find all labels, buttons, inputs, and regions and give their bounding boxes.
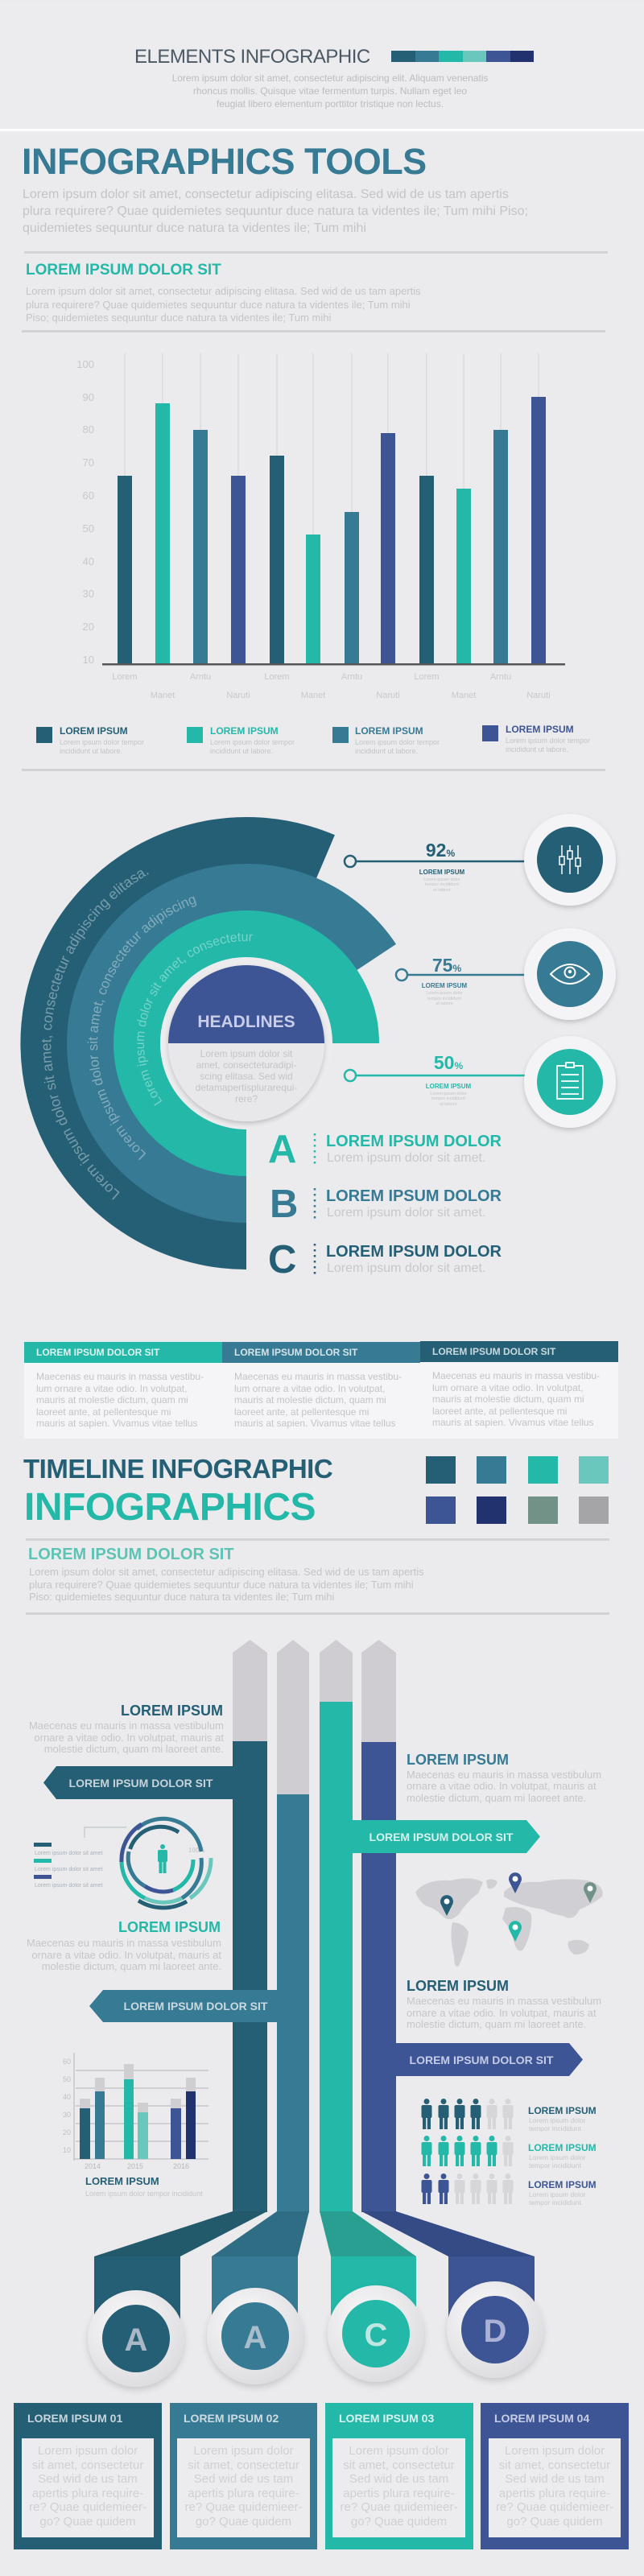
stat 50%	[345, 1052, 525, 1107]
people icons: Lorem ipsum dolor	[529, 2190, 586, 2198]
circle A second: A	[244, 2320, 266, 2355]
bar chart: Lorem	[414, 672, 440, 682]
bottom box 03: sit amet, consectetur	[343, 2458, 455, 2472]
stat 50%: LOREM IPSUM	[426, 1083, 472, 1090]
banner left 1	[43, 1766, 233, 1799]
intro paragraph: plura requirere? Quae quidemietes sequuntur duce natura ta videntes ile; Tum mihi Piso;	[23, 204, 528, 218]
chart legend: Lorem ipsum dolor tempor	[210, 738, 295, 746]
stat 75%: ut labore	[436, 1001, 453, 1006]
banner right 1	[353, 1820, 540, 1853]
bar chart: 50	[83, 522, 94, 535]
header subtext	[172, 72, 488, 109]
people icons: tempor incididunt	[529, 2198, 581, 2207]
column 1: mauris at sapien. Vivamus vitae tellus	[36, 1418, 198, 1429]
bottom box 04: go? Quae quidem	[506, 2515, 603, 2529]
bottom box 03: re? Quae quidemieer-	[341, 2500, 457, 2514]
list item C	[268, 1238, 502, 1282]
people icons: LOREM IPSUM	[528, 2105, 597, 2116]
bottom box 03: go? Quae quidem	[351, 2515, 447, 2529]
bottom box 02: re? Quae quidemieer-	[185, 2500, 302, 2514]
bar chart: Arntu	[190, 672, 211, 682]
chart intro text	[26, 285, 421, 324]
world map	[415, 1878, 603, 1967]
small bar chart: 2016	[173, 2162, 189, 2170]
circle A: A	[125, 2322, 147, 2358]
chart legend	[36, 724, 590, 755]
chart legend: incididunt ut labore.	[60, 747, 122, 755]
column 2: mauris at molestie dictum, quam mi	[234, 1394, 386, 1406]
chart legend: Lorem ipsum dolor tempor	[506, 737, 590, 745]
text block top right: molestie dictum, quam mi laoreet ante.	[407, 1792, 586, 1804]
bar chart: Arntu	[490, 672, 511, 682]
headlines text: HEADLINES	[197, 1013, 295, 1031]
timeline intro text: Piso: quidemietes sequuntur duce natura ta videntes ile; Tum mihi	[29, 1591, 334, 1603]
text block top left: Maecenas eu mauris in massa vestibulum	[29, 1719, 224, 1732]
list item A	[268, 1128, 502, 1171]
middle ring	[67, 864, 396, 1223]
headlines text: detamapertisplurarequi-	[196, 1082, 297, 1093]
column 1	[94, 1640, 267, 2337]
stat 75%: Lorem ipsum dolor	[426, 991, 463, 996]
list item C: C	[268, 1238, 296, 1282]
stat 92%: Lorem ipsum dolor	[423, 877, 460, 882]
heading: infographics tools: INFOGRAPHICS TOOLS	[22, 141, 427, 182]
small bar chart: 2015	[127, 2162, 143, 2170]
column 3: mauris at sapien. Vivamus vitae tellus	[432, 1417, 594, 1428]
circle C: C	[365, 2318, 387, 2353]
people icons: Lorem ipsum dolor	[529, 2116, 586, 2124]
bar chart: 90	[83, 391, 94, 403]
stat 92%: ut labore	[433, 888, 451, 893]
stat 50%: tempor incididunt	[431, 1096, 465, 1101]
banner left 2	[89, 1990, 277, 2022]
banner left 1: LOREM IPSUM DOLOR SIT	[69, 1777, 213, 1790]
bar chart: Lorem	[112, 672, 138, 682]
chart legend: LOREM IPSUM	[210, 725, 279, 737]
bar chart: 100	[76, 358, 94, 370]
column 1: Maecenas eu mauris in massa vestibu-	[36, 1371, 204, 1382]
text block top right: Maecenas eu mauris in massa vestibulum	[407, 1769, 601, 1781]
icon: clipboard	[524, 1036, 616, 1128]
bar chart: 40	[83, 555, 94, 568]
column 1: laoreet ante, at pellentesque mi	[36, 1406, 171, 1417]
column 3: LOREM IPSUM DOLOR SIT	[432, 1346, 555, 1357]
stat 50%: Lorem ipsum dolor	[430, 1092, 467, 1096]
people icons	[422, 2099, 597, 2207]
column 2: Maecenas eu mauris in massa vestibu-	[234, 1371, 402, 1382]
inner ring	[114, 910, 379, 1176]
headlines text: scing elitasa. Sed wid	[200, 1071, 293, 1082]
title: elements infographic: ELEMENTS INFOGRAPHIC	[134, 46, 370, 68]
chart legend: LOREM IPSUM	[60, 725, 128, 737]
text block top right: ornare a vitae odio. In volutpat, mauris at	[407, 1780, 597, 1792]
stat 50%: ut labore	[440, 1102, 457, 1107]
circle D: D	[484, 2314, 506, 2349]
bottom box 04: re? Quae quidemieer-	[496, 2500, 613, 2514]
donut chart: Lorem ipsum dolor sit amet	[35, 1883, 102, 1889]
column 3: Maecenas eu mauris in massa vestibu-	[432, 1370, 600, 1381]
chart intro text: Piso; quidemietes sequuntur duce natura ta videntes ile; Tum mihi	[26, 312, 331, 324]
text block top left: LOREM IPSUM	[121, 1703, 223, 1719]
bar chart: 70	[83, 456, 94, 469]
bottom box 03	[325, 2403, 473, 2549]
chart legend: incididunt ut labore.	[210, 747, 273, 755]
timeline intro text: plura requirere? Quae quidemietes sequuntur duce natura ta videntes ile; Tum mihi	[29, 1578, 414, 1591]
list item B	[270, 1183, 502, 1226]
text block top right: LOREM IPSUM	[407, 1752, 509, 1768]
bottom box 03: Lorem ipsum dolor	[349, 2444, 449, 2458]
column 1	[24, 1342, 222, 1429]
small bar chart: 20	[63, 2128, 71, 2136]
text block mid right	[407, 1978, 601, 2030]
header subtext: Lorem ipsum dolor sit amet, consectetur adipiscing elit. Aliquam venenatis	[172, 72, 488, 84]
ring texts: Lorem ipsum dolor sit amet, consectetur	[137, 932, 253, 1106]
text block mid right: molestie dictum, quam mi laoreet ante.	[407, 2018, 586, 2030]
bottom box 04: Lorem ipsum dolor	[505, 2444, 605, 2458]
banner right 2	[396, 2043, 583, 2076]
small bar chart: Lorem ipsum dolor tempor incididunt	[85, 2190, 203, 2198]
text block mid left: molestie dictum, quam mi laoreet ante.	[42, 1960, 221, 1972]
bar chart: Naruti	[376, 691, 400, 700]
people icons: tempor incididunt	[529, 2161, 581, 2169]
column 3	[320, 1640, 416, 2334]
chart legend: Lorem ipsum dolor tempor	[60, 738, 144, 746]
text block mid left: Maecenas eu mauris in massa vestibulum	[27, 1937, 221, 1949]
chart legend: Lorem ipsum dolor tempor	[355, 738, 440, 746]
column 2: lum ornare a vitae odio. In volutpat,	[234, 1383, 385, 1394]
stat 92%	[345, 840, 525, 893]
text block mid right: ornare a vitae odio. In volutpat, mauris at	[407, 2007, 597, 2019]
list item B: LOREM IPSUM DOLOR	[326, 1187, 502, 1205]
column 1: LOREM IPSUM DOLOR SIT	[36, 1347, 159, 1358]
list item B: B	[270, 1183, 298, 1226]
list item A: LOREM IPSUM DOLOR	[326, 1133, 502, 1150]
donut chart	[34, 1818, 211, 1908]
color swatches	[426, 1456, 609, 1524]
column 3: laoreet ante, at pellentesque mi	[432, 1406, 567, 1417]
bottom box 04	[481, 2403, 629, 2549]
column 3: lum ornare a vitae odio. In volutpat,	[432, 1381, 583, 1393]
stat 92%: LOREM IPSUM	[419, 869, 465, 876]
small bar chart	[63, 2053, 208, 2198]
circle D	[447, 2281, 543, 2378]
bottom box 02: LOREM IPSUM 02	[184, 2412, 279, 2425]
list item A: A	[268, 1128, 296, 1171]
list item C: Lorem ipsum dolor sit amet.	[327, 1261, 485, 1275]
chart legend: LOREM IPSUM	[355, 725, 423, 737]
donut chart: Lorem ipsum dolor sit amet	[35, 1851, 102, 1856]
bottom box 04: sit amet, consectetur	[499, 2458, 610, 2472]
bottom box 04: apertis plura require-	[499, 2487, 610, 2500]
bottom box 01: re? Quae quidemieer-	[29, 2500, 147, 2514]
bottom box 01: Lorem ipsum dolor	[38, 2444, 138, 2458]
list item B: Lorem ipsum dolor sit amet.	[327, 1206, 485, 1220]
stat 92%: 92%	[426, 840, 455, 861]
three column table	[24, 1342, 618, 1439]
small bar chart: LOREM IPSUM	[85, 2175, 159, 2187]
ring texts: Lorem ipsum dolor sit amet, consectetur adipiscing	[87, 897, 196, 1160]
circle A second	[207, 2288, 303, 2384]
bottom box 04: LOREM IPSUM 04	[494, 2412, 589, 2425]
circle C	[328, 2285, 424, 2382]
bottom box 02: apertis plura require-	[188, 2487, 299, 2500]
small bar chart: 60	[63, 2058, 71, 2066]
bottom box 01: sit amet, consectetur	[32, 2458, 143, 2472]
banner right 2: LOREM IPSUM DOLOR SIT	[410, 2054, 554, 2066]
text block mid left: ornare a vitae odio. In volutpat, mauris at	[31, 1949, 221, 1961]
banner right 1: LOREM IPSUM DOLOR SIT	[369, 1831, 514, 1843]
bar chart: 10	[83, 654, 94, 666]
column 2: mauris at sapien. Vivamus vitae tellus	[234, 1418, 396, 1429]
bar chart: 30	[83, 588, 94, 600]
ring texts: Lorem ipsum dolor sit amet, consectetur adipiscing elitasa.	[42, 870, 149, 1199]
chart legend: incididunt ut labore.	[506, 745, 568, 753]
chart legend: incididunt ut labore.	[355, 747, 418, 755]
bar chart	[76, 353, 565, 700]
intro paragraph: quidemietes sequuntur duce natura ta videntes ile; Tum mihi	[23, 221, 366, 235]
stat 50%: 50%	[434, 1052, 463, 1073]
bar chart: Naruti	[526, 691, 551, 700]
bar chart: Naruti	[226, 691, 250, 700]
header subtext: feugiat libero elementum porttitor tristique non lectus.	[217, 98, 444, 109]
column 2: laoreet ante, at pellentesque mi	[234, 1406, 369, 1417]
bottom box 02: sit amet, consectetur	[188, 2458, 299, 2472]
stat 75%	[396, 955, 525, 1006]
bottom box 01: go? Quae quidem	[39, 2515, 136, 2529]
bar chart: Arntu	[341, 672, 362, 682]
text block mid right: LOREM IPSUM	[407, 1978, 509, 1994]
timeline intro text	[29, 1566, 424, 1603]
small bar chart: 50	[63, 2075, 71, 2083]
small bar chart: 30	[63, 2111, 71, 2119]
people icons: Lorem ipsum dolor	[529, 2153, 586, 2161]
intro paragraph	[23, 188, 528, 235]
bottom box 01	[14, 2403, 162, 2549]
column 3	[420, 1341, 618, 1428]
column 2: LOREM IPSUM DOLOR SIT	[234, 1347, 357, 1358]
header background	[0, 3, 644, 131]
column 2	[222, 1342, 420, 1429]
column 3: mauris at molestie dictum, quam mi	[432, 1393, 584, 1405]
bar chart: 20	[83, 621, 94, 633]
chart intro text: plura requirere? Quae quidemietes sequuntur duce natura ta videntes ile; Tum mihi	[26, 298, 411, 311]
headlines text: Lorem ipsum dolor sit	[200, 1048, 293, 1059]
bottom box 04: Sed wid de us tam	[505, 2472, 605, 2486]
text block top left	[29, 1703, 224, 1755]
donut chart: Lorem ipsum dolor sit amet	[35, 1867, 102, 1872]
timeline intro text: Lorem ipsum dolor sit amet, consectetur adipiscing elitasa. Sed wid de us tam apertis	[29, 1566, 424, 1578]
outer ring	[20, 817, 335, 1269]
bottom box 02	[170, 2403, 317, 2549]
timeline graphic	[27, 1640, 602, 2392]
heading: timeline infographic: TIMELINE INFOGRAPHIC	[23, 1454, 332, 1484]
heading: infographics: INFOGRAPHICS	[24, 1486, 316, 1529]
list item C: LOREM IPSUM DOLOR	[326, 1243, 502, 1261]
text block top left: molestie dictum, quam mi laoreet ante.	[44, 1743, 224, 1755]
header subtext: rhoncus mollis. Quisque vitae fermentum turpis. Nullam eget leo	[193, 85, 467, 97]
ring texts	[42, 870, 253, 1199]
donut chart: 100%	[188, 1847, 204, 1854]
list item A: Lorem ipsum dolor sit amet.	[327, 1151, 485, 1165]
bottom box 03: Sed wid de us tam	[349, 2472, 448, 2486]
stat 75%: tempor incididunt	[427, 997, 461, 1001]
bar chart: 60	[83, 489, 94, 502]
circle A	[88, 2290, 184, 2387]
people icons: LOREM IPSUM	[528, 2179, 597, 2190]
headlines text: rere?	[235, 1093, 258, 1104]
color bar	[391, 51, 534, 62]
bottom box 03: LOREM IPSUM 03	[339, 2412, 434, 2425]
stat 75%: LOREM IPSUM	[422, 982, 468, 989]
bottom box 01: LOREM IPSUM 01	[27, 2412, 122, 2425]
headlines text	[196, 1013, 297, 1104]
chart intro text: Lorem ipsum dolor sit amet, consectetur adipiscing elitasa. Sed wid de us tam apertis	[26, 285, 421, 297]
icon: sliders	[524, 814, 616, 906]
bottom box 01: Sed wid de us tam	[38, 2472, 138, 2486]
column 4	[361, 1640, 535, 2330]
bottom box 01: apertis plura require-	[32, 2487, 143, 2500]
column 1: lum ornare a vitae odio. In volutpat,	[36, 1383, 187, 1394]
bottom box 02: Lorem ipsum dolor	[193, 2444, 294, 2458]
bottom box 03: apertis plura require-	[343, 2487, 455, 2500]
small bar chart: 10	[63, 2146, 71, 2154]
people icons: LOREM IPSUM	[528, 2142, 597, 2153]
headlines circle	[168, 965, 324, 1121]
headlines text: amet, consecteturadipi-	[196, 1059, 296, 1071]
bar chart: Manet	[151, 691, 175, 700]
text block mid left	[27, 1919, 221, 1972]
bar chart: Manet	[301, 691, 325, 700]
bottom box 02: Sed wid de us tam	[194, 2472, 293, 2486]
people icons: tempor incididunt	[529, 2124, 581, 2132]
banner left 2: LOREM IPSUM DOLOR SIT	[124, 2000, 268, 2013]
bar chart: 80	[83, 423, 94, 436]
stat 75%: 75%	[432, 955, 461, 976]
subheading timeline: LOREM IPSUM DOLOR SIT	[28, 1546, 234, 1563]
intro paragraph: Lorem ipsum dolor sit amet, consectetur adipiscing elitasa. Sed wid de us tam apertis	[23, 188, 509, 201]
icon: eye	[524, 928, 616, 1020]
bar chart: Lorem	[264, 672, 290, 682]
map pins	[440, 1872, 597, 1942]
stat 92%: tempor incididunt	[425, 882, 459, 887]
column 1: mauris at molestie dictum, quam mi	[36, 1394, 188, 1406]
chart legend: LOREM IPSUM	[506, 724, 574, 735]
bottom box 02: go? Quae quidem	[196, 2515, 291, 2529]
bar chart: Manet	[452, 691, 476, 700]
text block mid right: Maecenas eu mauris in massa vestibulum	[407, 1995, 601, 2007]
half ring diagram	[20, 814, 617, 1282]
text block mid left: LOREM IPSUM	[118, 1919, 221, 1935]
subheading: lorem ipsum dolor sit: LOREM IPSUM DOLOR SIT	[26, 262, 221, 279]
column 2	[212, 1640, 309, 2337]
small bar chart: 2014	[85, 2162, 101, 2170]
text block top left: ornare a vitae odio. In volutpat, mauris at	[34, 1732, 224, 1744]
small bar chart: 40	[63, 2093, 71, 2101]
text block top right	[407, 1752, 601, 1804]
